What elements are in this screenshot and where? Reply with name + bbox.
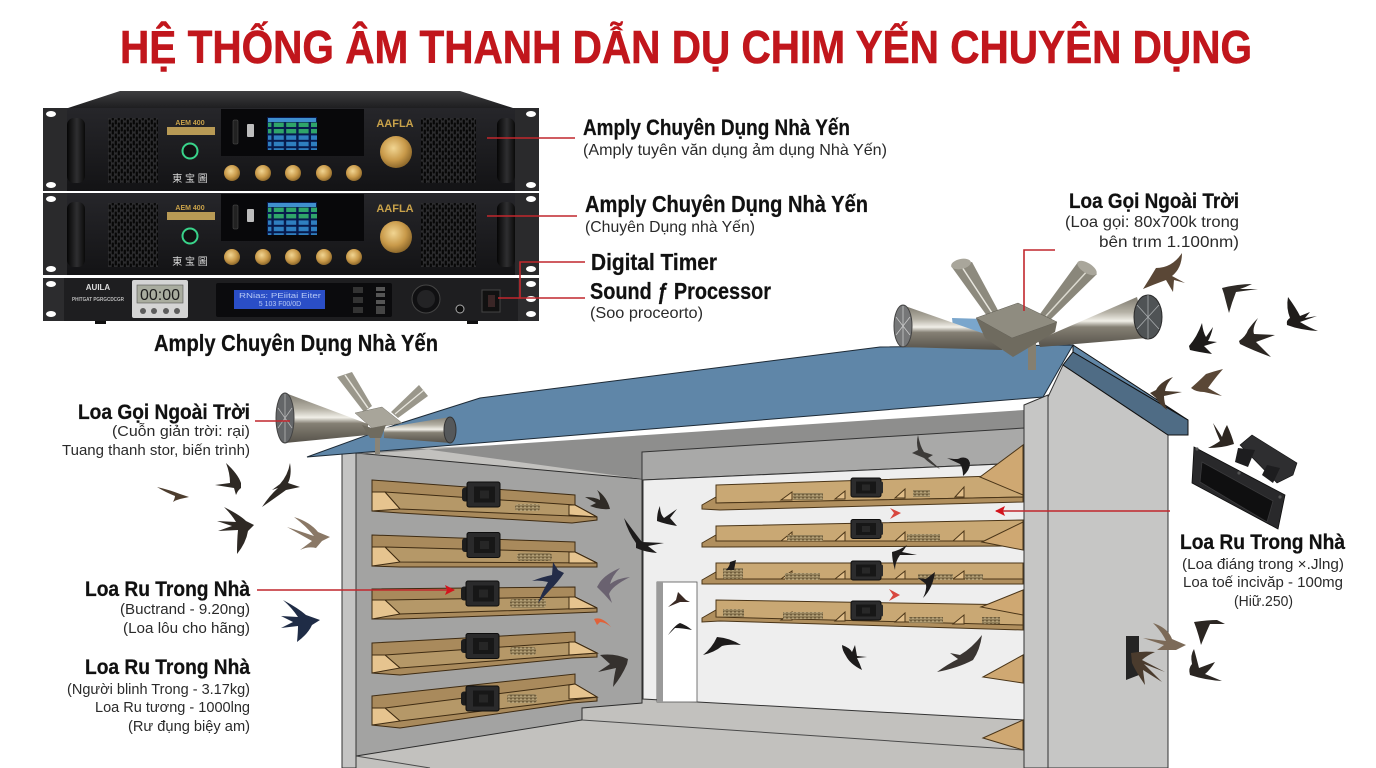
icon: outdoor horn speaker on left roof: [276, 372, 456, 454]
label: sound processor: [590, 278, 771, 322]
caption: amply rack: Amply Chuyên Dụng Nhà Yến: [154, 330, 438, 356]
shelf 3: [372, 581, 597, 619]
label: indoor speaker left 2: (Rư đụng biệy am): [128, 718, 250, 735]
back shelf 2: [702, 520, 1023, 547]
amplifier rack: [43, 91, 539, 324]
shelf 4: [372, 632, 597, 675]
label: outdoor call speaker right: (Loa gọi: 80x700k trong: [1065, 214, 1239, 231]
label: sound processor: (Soo proceorto): [590, 305, 703, 322]
label: indoor speaker right: (Hiữ.250): [1234, 593, 1293, 610]
label: amply 2: Amply Chuyên Dụng Nhà Yến: [585, 191, 868, 217]
label: sound processor: Sound ƒ Processor: [590, 278, 771, 304]
label: indoor speaker left 2: (Người blinh Trong - 3.17kg): [67, 681, 250, 698]
arrows and leaders for speakers: [255, 250, 1170, 590]
label: indoor speaker left 1: Loa Ru Trong Nhà: [85, 578, 250, 601]
ceiling: [345, 410, 1024, 479]
label: indoor speaker right: [1180, 531, 1345, 610]
label: outdoor call speaker left: Loa Gọi Ngoài Trời: [78, 401, 250, 424]
label: indoor speaker right: Loa toế incivăp - 100mg: [1183, 574, 1343, 591]
timer and sound processor unit: [43, 278, 539, 324]
label: indoor speaker left 2: Loa Ru Trong Nhà: [85, 656, 250, 679]
left wall column: [342, 450, 356, 768]
icon: outdoor horn speaker on roof ridge: [894, 257, 1162, 370]
amplifier unit 2: AAFLA: [376, 203, 414, 215]
bird house cross-section: [307, 318, 1188, 768]
icon: wall entry vent: [1126, 636, 1139, 680]
birds outside right: [1131, 253, 1318, 685]
shelf 5: [372, 674, 597, 728]
label: indoor speaker left 2: Loa Ru tương - 1000lng: [95, 699, 250, 716]
digital timer display: [132, 280, 188, 318]
timer and sound processor unit: 5 103 F00/0D: [259, 301, 301, 308]
digital timer display: 00:00: [140, 287, 180, 304]
back shelf 1: [702, 475, 1023, 510]
back wall: [643, 463, 1024, 720]
label: indoor speaker left 1: (Buctrand - 9.20ng): [120, 601, 250, 618]
callout leader lines for rack: [487, 138, 585, 298]
label: amply 2: [585, 191, 868, 236]
amplifier unit 1: AAFLA: [376, 118, 414, 130]
roof: [307, 318, 1188, 457]
label: amply 2: (Chuyên Dụng nhà Yến): [585, 219, 755, 236]
label: amply 1: Amply Chuyên Dụng Nhà Yến: [583, 115, 850, 140]
label: amply 1: [583, 115, 887, 159]
label: indoor speaker left 2: [67, 656, 250, 735]
timer and sound processor unit: AUILA: [86, 283, 110, 292]
label: outdoor call speaker left: [62, 401, 250, 459]
back wall nesting shelves: [702, 445, 1023, 750]
birds inside house: [532, 435, 982, 687]
back shelf 4: [702, 600, 1023, 630]
label: indoor speaker right: (Loa điáng trong ×.Jlng): [1182, 556, 1344, 573]
amplifier unit 1: 東 宝 圖: [172, 172, 208, 185]
timer and sound processor unit: PHITGAT PGRGCDCGR: [72, 297, 124, 303]
shelf 1: [372, 480, 597, 523]
chevrons on back wall: [889, 508, 901, 601]
amplifier unit 1: AEM 400: [175, 120, 205, 127]
label: indoor speaker left 1: [85, 578, 250, 637]
amplifier unit 2: 東 宝 圖: [172, 255, 208, 268]
label: outdoor call speaker right: bên trım 1.100nm): [1099, 234, 1239, 251]
label: outdoor call speaker right: [1065, 190, 1239, 251]
label: outdoor call speaker left: (Cuỗn giản trời: rại): [112, 423, 250, 440]
label: indoor speaker right: Loa Ru Trong Nhà: [1180, 531, 1345, 554]
label: amply 1: (Amply tuyên văn dụng ảm dụng Nhà Yến): [583, 142, 887, 159]
birds outside left: [157, 463, 330, 642]
left wall nesting shelves: [372, 480, 597, 728]
amplifier unit 2: AEM 400: [175, 205, 205, 212]
label: outdoor call speaker left: Tuang thanh stor, biến trình): [62, 442, 250, 459]
amplifier unit 1: [43, 91, 539, 191]
shelf 2: [372, 532, 597, 567]
door opening: [657, 582, 697, 702]
label: indoor speaker left 1: (Loa lôu cho hãng): [123, 620, 250, 637]
side wall shelf wedges: [980, 445, 1023, 750]
label: digital timer: Digital Timer: [591, 249, 717, 275]
right wall column and gable: [1024, 395, 1048, 768]
amplifier unit 2: [43, 193, 539, 275]
label: outdoor call speaker right: Loa Gọi Ngoài Trời: [1069, 190, 1239, 213]
floor: [342, 430, 1024, 768]
icon: black indoor horn speaker: [1192, 435, 1297, 529]
title: HỆ THỐNG ÂM THANH DẪN DỤ CHIM YẾN CHUYÊN DỤNG: [120, 21, 1252, 73]
back shelf 3: [702, 561, 1023, 584]
timer and sound processor unit: RNias: PEiitai Eiter: [239, 293, 322, 300]
left interior wall: [356, 453, 642, 756]
